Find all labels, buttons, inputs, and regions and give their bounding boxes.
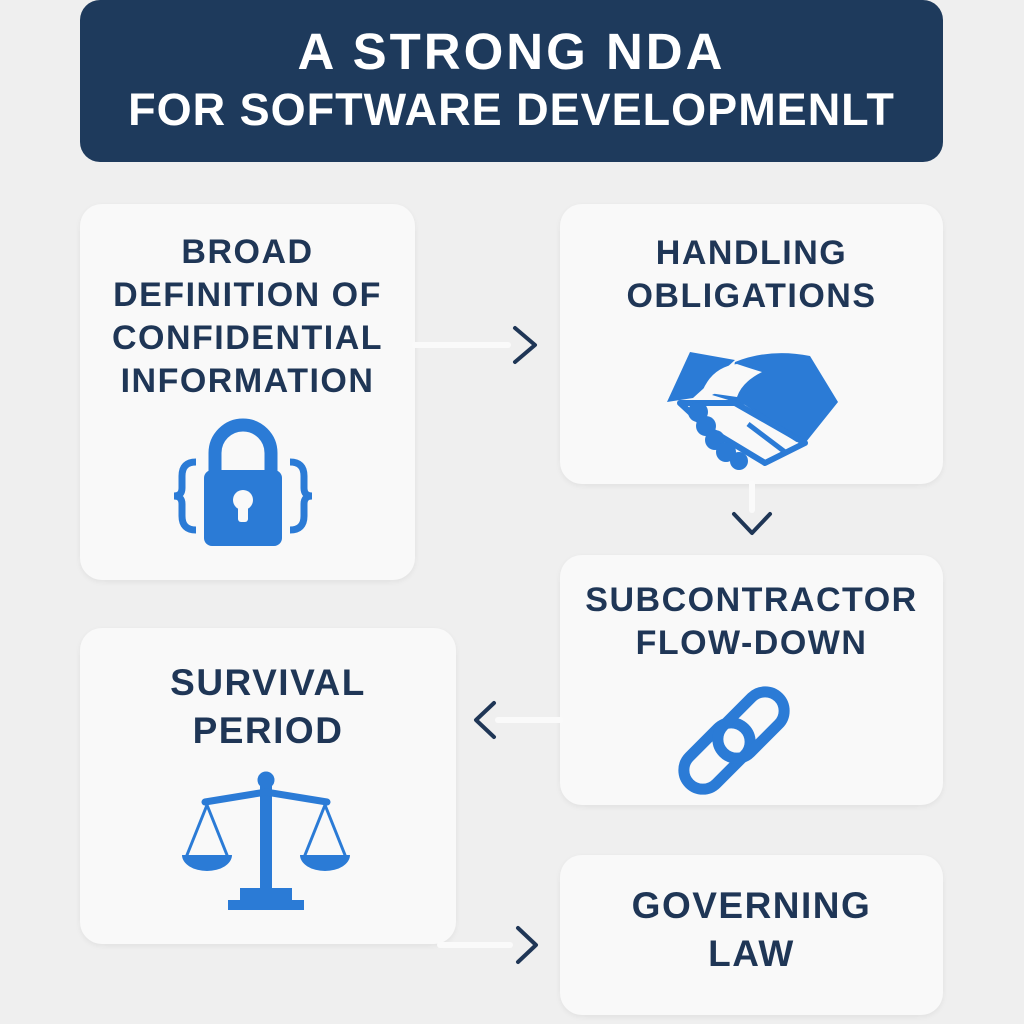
icon: scales of justice (182, 772, 350, 910)
card: subcontractor flow-down (560, 555, 943, 805)
icon: chain link (676, 684, 792, 797)
card: broad definition: INFORMATION (121, 362, 374, 400)
card: handling obligations: HANDLING (656, 234, 847, 272)
title banner: FOR SOFTWARE DEVELOPMENLT (128, 84, 895, 135)
card: governing law: LAW (708, 933, 795, 974)
card: broad definition: DEFINITION OF (113, 276, 382, 314)
card: broad definition: BROAD (181, 233, 314, 271)
arrow: subcontractor to survival (476, 703, 560, 737)
arrow: survival to governing law (440, 928, 536, 962)
card: governing law (560, 855, 943, 1015)
card: governing law: GOVERNING (632, 885, 871, 926)
card: subcontractor flow-down: SUBCONTRACTOR (585, 581, 918, 619)
arrow: handling to subcontractor (734, 484, 770, 533)
arrow: definition to handling (415, 328, 535, 362)
icon: handshake (667, 352, 838, 470)
card: survival period: PERIOD (193, 710, 343, 751)
card: subcontractor flow-down: FLOW-DOWN (636, 624, 867, 662)
card: survival period (80, 628, 456, 944)
title banner (80, 0, 943, 162)
title banner: A STRONG NDA (298, 23, 725, 80)
card: broad definition (80, 204, 415, 580)
card: handling obligations: OBLIGATIONS (626, 277, 877, 315)
card: handling obligations (560, 204, 943, 484)
card: survival period: SURVIVAL (170, 662, 366, 703)
card: broad definition: CONFIDENTIAL (112, 319, 383, 357)
icon: lock with braces (174, 425, 312, 546)
